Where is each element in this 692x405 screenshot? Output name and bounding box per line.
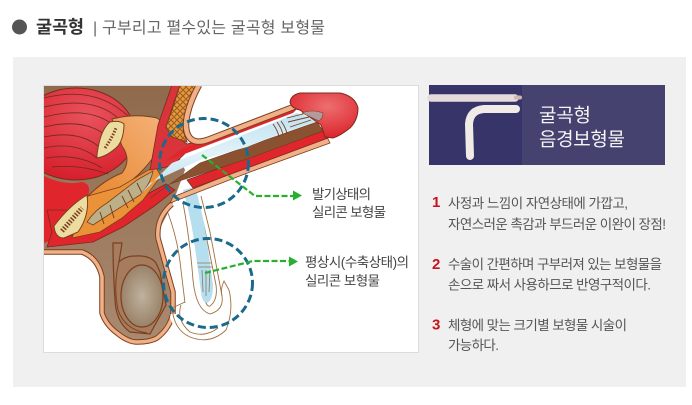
- fatty tissue: [150, 85, 199, 170]
- list item 2: 2: [432, 256, 440, 273]
- label: flaccid state: 평상시(수축상태)의: [305, 255, 409, 270]
- list item 3: 가능하다.: [448, 338, 499, 353]
- flaccid penis outline: [155, 196, 232, 340]
- flaccid silicone implant: [183, 187, 213, 303]
- list item 3: 3: [432, 316, 440, 334]
- red vessel band: [47, 184, 175, 247]
- arrow: erect implant: [202, 155, 302, 200]
- upper bone: [88, 116, 166, 196]
- pelvic body and scrotum: [44, 85, 185, 342]
- label: flaccid state: 실리콘 보형물: [305, 274, 380, 288]
- spongy tissue: [87, 171, 153, 225]
- list item 1: 사정과 느낌이 자연상태에 가깝고,: [448, 196, 628, 211]
- panel: background: [13, 57, 686, 387]
- lower orange crus: [72, 166, 161, 238]
- card title: 음경보형물: [539, 128, 625, 150]
- heading bullet: [12, 20, 27, 34]
- testicle: [113, 243, 166, 334]
- label: flaccid state: [305, 255, 409, 288]
- list item 2: 수술이 간편하며 구부러져 있는 보형물을: [448, 257, 662, 272]
- label: erect state: [312, 187, 386, 220]
- photo of implants: [429, 85, 522, 165]
- lower bone: [54, 195, 88, 238]
- panel: implant card: [429, 85, 665, 165]
- muscle: [44, 88, 130, 243]
- list item 1: [432, 194, 666, 232]
- list item 1: 자연스러운 촉감과 부드러운 이완이 장점!: [448, 217, 666, 232]
- list item 3: 체형에 맞는 크기별 보형물 시술이: [448, 318, 627, 333]
- list item 3: [432, 316, 627, 353]
- callout circle: flaccid state: [164, 238, 252, 328]
- arrow: flaccid implant: [205, 256, 298, 273]
- erect shaft layers: [140, 85, 330, 203]
- callout circle: erect state: [160, 118, 248, 208]
- card title: [539, 104, 625, 150]
- list item 2: 손으로 짜서 사용하므로 반영구적이다.: [448, 278, 651, 292]
- panel: anatomy illustration: [17, 85, 418, 352]
- title: 굴곡형: [36, 17, 84, 37]
- label: erect state: 실리콘 보형물: [312, 205, 386, 220]
- list item 2: [432, 256, 662, 292]
- card title: 굴곡형: [539, 104, 591, 126]
- glans: [290, 93, 358, 138]
- label: erect state: 발기상태의: [312, 187, 371, 202]
- subtitle: | 구부리고 펼수있는 굴곡형 보형물: [93, 19, 325, 37]
- list item 1: 1: [432, 194, 440, 211]
